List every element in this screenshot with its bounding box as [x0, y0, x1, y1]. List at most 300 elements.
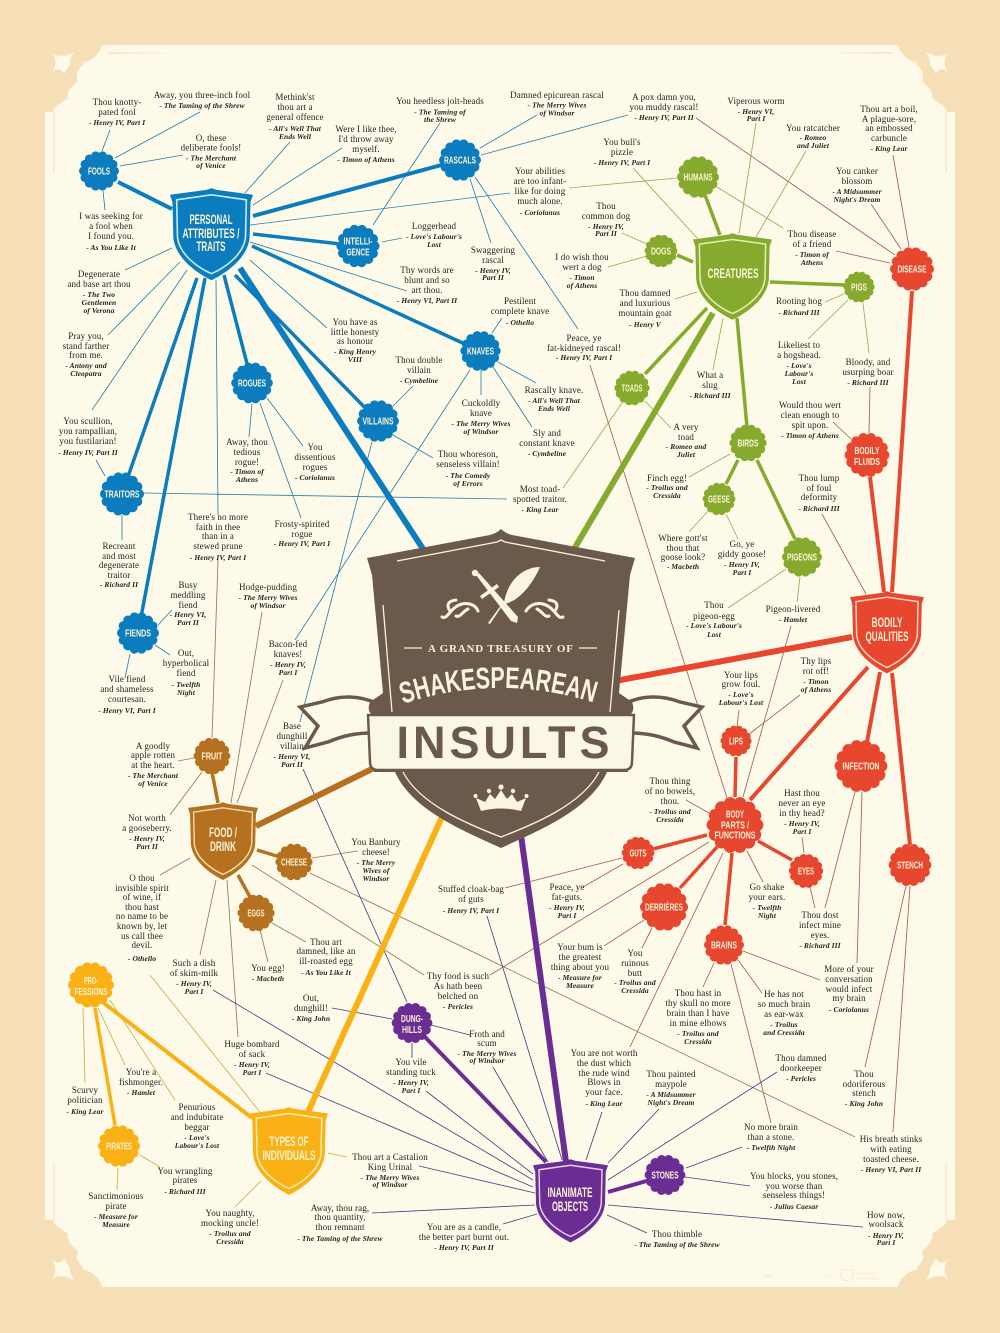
- quote: hyperbolical: Night: [176, 688, 196, 697]
- quote: rag: - The Taming of the Shrew: [297, 1234, 384, 1243]
- quote: lump: of foul: [806, 483, 832, 493]
- quote: infect eyes: eyes.: [811, 930, 829, 940]
- node: disease: DISEASE: [898, 264, 926, 276]
- quote: like thee: myself.: [352, 144, 380, 154]
- quote: bombard: of sack: [239, 1049, 266, 1059]
- quote: general offence: [266, 92, 324, 141]
- quote: scullion: you rampallian,: [59, 426, 117, 436]
- quote: no bowels: of no bowels,: [645, 786, 695, 796]
- quote: blunt: [397, 265, 458, 305]
- quote: wine: us call thee: [121, 931, 163, 941]
- quote: ear-wax: and Cressida: [763, 1028, 805, 1037]
- quote: ear-wax: as ear-wax: [764, 1009, 804, 1019]
- node: pigs: [847, 275, 871, 299]
- quote: lump: [798, 473, 841, 513]
- quote: abilities: [514, 166, 566, 217]
- quote: bum: [551, 942, 610, 990]
- node: pigeons: PIGEONS: [787, 552, 817, 564]
- quote: cuckoldly: knave: [470, 408, 492, 418]
- quote: castalion: of Windsor: [373, 1180, 407, 1189]
- quote: lips foul: grow foul.: [722, 679, 760, 689]
- quote: disease of a friend: - Timon of: [795, 250, 830, 259]
- quote: castalion: [352, 1152, 428, 1189]
- node: eggs: EGGS: [248, 908, 264, 920]
- node: fools: [84, 156, 114, 186]
- central crest: [296, 529, 706, 848]
- quote: beggar: and indubitate: [171, 1112, 223, 1122]
- quote: wine: invisible spirit: [115, 883, 169, 893]
- quote: general offence: Methink'st: [275, 92, 315, 102]
- quote: gooseberry: a gooseberry.: [122, 823, 172, 833]
- shield: personal attributes: ATTRIBUTES /: [182, 226, 240, 241]
- quote: muddy rascal: [629, 92, 699, 122]
- corner ornament: bottom left: [45, 1220, 102, 1287]
- quote: dissentious: rogues: [303, 462, 328, 472]
- corner ornament: top left: [45, 45, 102, 112]
- quote: breath: toasted cheese.: [863, 1154, 919, 1164]
- quote: candle: [419, 1222, 509, 1252]
- quote: toad: A very: [674, 422, 699, 432]
- icon: sword: [472, 570, 518, 623]
- quote: ill-roasted egg: Thou art: [310, 937, 342, 947]
- node: humans: HUMANS: [684, 172, 712, 184]
- quote: stewed prune: - Henry IV, Part I: [190, 553, 247, 562]
- quote: degenerate: and base art thou: [67, 279, 131, 289]
- shield: food and drink: DRINK: [210, 839, 236, 854]
- quote: woolsack: [867, 1210, 905, 1247]
- quote: bum: Measure: [565, 981, 594, 990]
- node: fiends: [122, 617, 154, 649]
- node: cheese: [280, 848, 308, 876]
- quote: boar: - Richard III: [847, 378, 890, 387]
- quote: base dunghill: [274, 721, 310, 769]
- quote: no bowels: thou.: [661, 796, 679, 806]
- quote: canker: You canker: [836, 166, 878, 176]
- quote: loggerhead: Loggerhead: [412, 221, 456, 231]
- quote: little honesty: - King Henry: [334, 347, 377, 356]
- quote: maypole: Thou painted: [646, 1069, 696, 1079]
- quote: thimble: - The Taming of the Shrew: [634, 1240, 721, 1249]
- node: professions: [73, 967, 109, 1003]
- quote: castalion: King Urinal: [368, 1162, 413, 1172]
- shield: creatures: [693, 233, 772, 320]
- quote: boar: usurping boar: [842, 367, 894, 377]
- quote: degenerate: - The Two: [83, 290, 115, 299]
- quote: scullion: - Henry IV, Part II: [58, 448, 119, 457]
- quote: pestilent: Pestilent: [504, 296, 536, 306]
- quote: giddy goose: - Henry IV,: [724, 560, 760, 569]
- icon: flourish right: [526, 600, 563, 617]
- quote: giddy goose: Part I: [733, 568, 752, 577]
- quote: finch egg: Cressida: [653, 491, 681, 500]
- quote: epicurean: [510, 90, 604, 118]
- quote: blocks: - Julius Caesar: [770, 1202, 818, 1211]
- quote: skull: - Troilus and: [677, 1029, 719, 1038]
- quote: ratcatcher: - Romeo: [800, 133, 827, 142]
- node: pigeons: [786, 542, 818, 572]
- thin connectors: purple: [213, 769, 863, 1233]
- node: infection: [841, 746, 881, 786]
- quote: spit upon: [779, 400, 841, 440]
- quote: pigeon-livered: Pigeon-livered: [766, 604, 821, 614]
- quote: gooseberry: [122, 813, 172, 851]
- thin connectors: blue: [92, 112, 628, 722]
- quote: pray you: [63, 331, 109, 378]
- quote: rag: Away, thou rag,: [311, 1203, 369, 1213]
- quote: hodge-pudding: of Windsor: [251, 601, 285, 610]
- thick branches: red: [615, 291, 912, 925]
- quote: common dog: - Henry IV,: [588, 222, 624, 231]
- quote: bacon-fed: Bacon-fed: [269, 639, 308, 649]
- quote: odoriferous: - King John: [845, 1099, 883, 1108]
- quote: cloak-bag: of guts: [458, 894, 484, 904]
- quote: ruinous butt: [614, 948, 656, 995]
- quote: blunt: - Henry VI, Part II: [397, 296, 458, 305]
- quote: belched: belched on: [438, 991, 479, 1001]
- thin connectors: green: [563, 123, 869, 608]
- quote: shake ears: your ears.: [749, 892, 785, 902]
- quote: pray you: from me.: [69, 350, 103, 360]
- quote: dust: your face.: [585, 1087, 623, 1097]
- shield body: [367, 529, 635, 848]
- quote: finch egg: - Troilus and: [646, 483, 688, 492]
- quote: belched: As hath been: [434, 981, 483, 991]
- quote: blocks: You blocks, you stones,: [750, 1171, 838, 1181]
- quote: candle: - Henry IV, Part II: [434, 1243, 495, 1252]
- quote: eye: Hast thou: [784, 788, 820, 798]
- footer maker mark: XX: [824, 1273, 830, 1278]
- quote: like thee: Were I like thee,: [335, 124, 397, 134]
- quote: blunt: blunt and so: [404, 275, 450, 285]
- node: dunghills: DUNG-: [401, 1013, 423, 1025]
- quote: dissentious: dissentious: [294, 452, 336, 462]
- quote: canker: [832, 166, 882, 204]
- title: Shakespearean: [403, 688, 598, 704]
- shield: bodily qualities: [850, 591, 924, 673]
- node: geese: [706, 486, 732, 512]
- quote: spit upon: clean enough to: [781, 410, 840, 420]
- quote: cuckoldly: of Windsor: [464, 427, 498, 436]
- quote: jolt-heads: You heedless jolt-heads: [396, 96, 484, 106]
- quote: ratcatcher: You ratcatcher: [786, 123, 840, 133]
- icon: flourish left: [442, 600, 478, 617]
- quote: wine: of wine, if: [123, 892, 161, 902]
- quote: muddy rascal: A pox damn you,: [632, 92, 696, 102]
- quote: loggerhead: Lost: [426, 240, 442, 249]
- node: stones: STONES: [652, 1170, 678, 1182]
- quote: hodge-pudding: [239, 582, 297, 610]
- quote: fishmonger: [119, 1067, 163, 1097]
- quote: goose look: goose look?: [661, 552, 705, 562]
- quote: viperous: - Henry VI,: [738, 107, 774, 116]
- quote: froth: Froth and: [469, 1029, 505, 1039]
- node: geese: GEESE: [708, 494, 730, 506]
- quote: double villain: - Cymbeline: [400, 376, 439, 385]
- quote: common dog: common dog: [582, 211, 631, 221]
- quote: standing tuck: standing tuck: [386, 1067, 436, 1077]
- quote: sanctimonious: - Measure for: [94, 1212, 138, 1221]
- quote: bum: - Measure for: [558, 973, 602, 982]
- quote: standing tuck: You vile: [395, 1057, 427, 1067]
- node: knaves: [465, 335, 496, 367]
- node: pigs: PIGS: [851, 282, 867, 294]
- quote: skim-milk: [170, 958, 218, 996]
- quote: no bowels: [645, 776, 695, 824]
- quote: toad: - Romeo and: [666, 442, 706, 451]
- quote: wrangling pirates: [158, 1166, 213, 1196]
- quote: infect eyes: [799, 910, 842, 950]
- quote: stewed prune: faith in thee: [196, 522, 240, 532]
- quote: knotty-pated: Thou knotty-: [93, 97, 141, 107]
- quote: common dog: Part II: [595, 229, 618, 238]
- quote: lump: Thou lump: [799, 473, 840, 483]
- quote: common dog: Thou: [596, 201, 616, 211]
- quote: constant knave: constant knave: [519, 438, 575, 448]
- shield: personal attributes: [170, 188, 253, 280]
- quote: frosty-spirited: Frosty-spirited: [275, 519, 330, 529]
- quote: lips foul: Your lips: [724, 670, 758, 680]
- quote: wrangling pirates: - Richard III: [164, 1187, 207, 1196]
- quote: swaggering: Part II: [482, 273, 505, 282]
- quote: politician: Scurvy: [72, 1085, 98, 1095]
- quote: eye: never an eye: [779, 798, 825, 808]
- quote: cloak-bag: - Henry IV, Part I: [443, 906, 500, 915]
- quote: goat: and luxurious: [620, 298, 671, 308]
- quote: cuckoldly: - The Merry Wives: [452, 419, 510, 428]
- quote: spit upon: Would thou wert: [779, 400, 841, 410]
- quote: whoreson: Thou whoreson,: [438, 449, 498, 459]
- quote: no bowels: Thou thing: [650, 776, 691, 786]
- quote: pray you: stand farther: [63, 341, 109, 351]
- quote: pigeon-livered: [766, 604, 821, 624]
- quote: odoriferous: stench: [852, 1088, 876, 1098]
- quote: fat-guts: Part I: [558, 911, 577, 920]
- quote: canker: - A Midsummer: [832, 187, 882, 196]
- quote: giddy goose: [718, 539, 766, 577]
- quote: abilities: - Coriolanus: [520, 208, 560, 217]
- quote: banbury: - The Merry: [357, 858, 396, 867]
- quote: goat: - Henry V: [629, 320, 662, 329]
- node: villains: [362, 405, 394, 437]
- quote: skull: Cressida: [684, 1037, 712, 1046]
- quote: banbury: Wives of: [363, 866, 391, 875]
- quote: jolt-heads: - The Taming of: [414, 108, 467, 116]
- quote: whoreson: of Errors: [453, 479, 483, 488]
- node: eggs: [242, 899, 270, 927]
- quote: doorkeeper: [775, 1053, 827, 1083]
- quote: mocking uncle: You naughty,: [206, 1208, 254, 1218]
- quote: ear-wax: [758, 989, 811, 1037]
- quote: out dunghill: [292, 993, 330, 1023]
- footer maker mark: CHARLEY: [856, 1271, 877, 1276]
- quote: frosty-spirited: - Henry IV, Part I: [274, 539, 331, 548]
- node: body parts: BODY: [726, 808, 744, 820]
- thin connectors: red: [490, 118, 910, 1132]
- quote: jolt-heads: [396, 96, 484, 124]
- quote: frosty-spirited: [274, 519, 331, 548]
- node: intelligence: INTELLI-: [344, 236, 373, 248]
- quote: ill-roasted egg: - As You Like It: [301, 968, 352, 977]
- quote: degenerate: Degenerate: [78, 269, 120, 279]
- quote: castalion: - The Merry Wives: [361, 1173, 419, 1182]
- quote: pizzle: pizzle: [611, 147, 633, 157]
- quote: frosty-spirited: rogue: [291, 529, 313, 539]
- quote: seeking a fool: - As You Like It: [86, 243, 137, 252]
- node: dogs: [648, 238, 674, 264]
- quote: blocks: senseless things!: [763, 1190, 825, 1200]
- quote: shake ears: - Twelfth: [753, 903, 781, 912]
- quote: ill-roasted egg: ill-roasted egg: [299, 956, 353, 966]
- quote: goose look: Where gott'st: [658, 533, 708, 543]
- quote: recreant: Recreant: [103, 541, 136, 551]
- quote: tedious rogue: tedious: [234, 447, 261, 457]
- quote: hyperbolical: hyperbolical: [163, 658, 210, 668]
- quote: slug: slug: [702, 380, 718, 390]
- quote: beggar: Labour's Lost: [174, 1141, 220, 1150]
- footer maker mark: 1564: [763, 1273, 774, 1278]
- quote: general offence: - All's Well That: [269, 124, 322, 133]
- quote: lips rot: [801, 656, 832, 694]
- quote: stewed prune: There's no more: [188, 512, 248, 522]
- quote: sanctimonious: pirate: [105, 1201, 127, 1211]
- node: rogues: ROGUES: [238, 378, 266, 390]
- quote: degenerate: [67, 269, 131, 315]
- footer maker mark: CHASTWELL: [856, 1276, 884, 1281]
- quote: goat: Thou damned: [619, 288, 671, 298]
- quote: standing tuck: - Henry IV,: [393, 1078, 429, 1087]
- quote: wine: [115, 873, 169, 963]
- quote: maypole: [646, 1069, 696, 1107]
- quote: viperous: Part I: [747, 114, 766, 123]
- quote: general offence: Ends Well: [278, 132, 312, 141]
- quote: maypole: maypole: [655, 1079, 687, 1089]
- quote: blocks: you worse than: [766, 1181, 823, 1191]
- quote: toad: toad: [678, 432, 694, 442]
- quote: beggar: Penurious: [178, 1102, 216, 1112]
- quote: hogshead: Likeliest to: [778, 340, 820, 350]
- node: birds: BIRDS: [738, 438, 758, 450]
- quote: rascally: Ends Well: [537, 404, 571, 413]
- quote: tedious rogue: rogue!: [235, 457, 259, 467]
- quote: dust: You are not worth: [571, 1048, 638, 1058]
- quote: sanctimonious: [88, 1191, 144, 1229]
- quote: finch egg: [646, 473, 688, 500]
- thick branches: blue: [118, 160, 480, 633]
- quote: epicurean: Damned epicurean rascal: [510, 90, 604, 100]
- quote: stone: [744, 1122, 798, 1152]
- ribbon tail: left: [300, 697, 378, 748]
- quote: dissentious: [294, 442, 336, 482]
- corner ornament: bottom right: [898, 1220, 955, 1287]
- node: bodily fluids: BODILY: [854, 445, 880, 457]
- quote: eye: [779, 788, 825, 836]
- quote: odoriferous: odoriferous: [843, 1079, 886, 1089]
- quote: pigeon-egg: Lost: [706, 630, 722, 639]
- quote: pestilent: - Othello: [506, 318, 534, 327]
- quote: pigeon-egg: pigeon-egg: [693, 611, 735, 621]
- quote: froth: of Windsor: [470, 1056, 504, 1065]
- quote: ratcatcher: and Juliet: [797, 141, 830, 150]
- quote: fishmonger: - Hamlet: [127, 1088, 156, 1097]
- quote: goat: mountain goat: [618, 308, 672, 318]
- quote: candle: You are as a candle,: [427, 1222, 501, 1232]
- node: intelligence: [341, 229, 375, 263]
- quote: muddy rascal: you muddy rascal!: [629, 102, 699, 112]
- quote: infect eyes: Thou dost: [801, 910, 839, 920]
- quote: tedious rogue: Away, thou: [226, 437, 268, 447]
- node: dunghills: HILLS: [402, 1024, 422, 1036]
- quote: whoreson: senseless villain!: [436, 459, 500, 469]
- quote: lips rot: - Timon: [803, 677, 829, 686]
- quote: general offence: thou art a: [277, 102, 313, 112]
- quote: base dunghill: dunghill: [277, 731, 308, 741]
- quote: spit upon: - Timon of Athens: [781, 431, 839, 440]
- quote: apple: of Venice: [138, 779, 168, 788]
- node: pirates: [103, 1130, 135, 1162]
- quote: pizzle: - Henry IV, Part I: [594, 158, 651, 167]
- quote: infect brain: would infect: [826, 984, 873, 994]
- shield: food and drink: [188, 802, 258, 880]
- node: bodily fluids: FLUIDS: [854, 456, 880, 468]
- quote: canker: Night's Dream: [833, 195, 881, 204]
- quote: muddy rascal: - Henry IV, Part II: [634, 113, 695, 122]
- quote: scullion: You scullion,: [63, 416, 113, 426]
- quote: boil: an embossed: [865, 123, 913, 133]
- quote: bacon-fed: Part I: [279, 668, 298, 677]
- quote: ratcatcher: [786, 123, 840, 150]
- quote: constant knave: [519, 428, 575, 458]
- quote: belched: Thy food is such: [427, 971, 489, 981]
- quote: cloak-bag: [438, 884, 504, 915]
- quote: viperous: [727, 96, 785, 123]
- quote: skim-milk: Such a dish: [173, 958, 216, 968]
- quote: busy fiend: fiend: [178, 600, 198, 610]
- quote: breath: His breath stinks: [860, 1134, 923, 1144]
- quote: belched: [427, 971, 489, 1011]
- node: pirates: PIRATES: [106, 1140, 132, 1152]
- quote: bombard: Huge bombard: [224, 1039, 280, 1049]
- quote: woolsack: How now,: [867, 1210, 905, 1220]
- quote: lips rot: Thy lips: [801, 656, 832, 666]
- node: guts: GUTS: [630, 848, 646, 860]
- quote: woolsack: Part I: [877, 1238, 896, 1247]
- quote: pigeon-livered: - Hamlet: [779, 615, 808, 624]
- quote: pray you: Cleopatra: [70, 369, 102, 378]
- quote: rascally: Rascally knave.: [525, 385, 583, 395]
- quote: stewed prune: than in a: [202, 531, 234, 541]
- quote: giddy goose: Go, ye: [730, 539, 754, 549]
- quote: jolt-heads: the Shrew: [424, 115, 457, 124]
- quote: pigeon-egg: [686, 600, 742, 639]
- quote block: all insults: [58, 90, 923, 1252]
- node: professions: FESSIONS: [74, 986, 108, 998]
- quote: doorkeeper: Thou damned: [775, 1053, 827, 1063]
- quote: fat-kidneyed: fat-kidneyed rascal!: [547, 343, 621, 353]
- quote: seeking a fool: I was seeking for: [79, 211, 143, 221]
- quote: deliberate fools: - The Merchant: [186, 154, 237, 162]
- quote: wine: - Othello: [128, 954, 156, 963]
- quote: swaggering: [471, 245, 515, 282]
- quote: no bowels: Cressida: [656, 815, 684, 824]
- quote: mocking uncle: - Troilus and: [209, 1229, 251, 1238]
- quote: skim-milk: - Henry IV,: [176, 979, 212, 988]
- quote: skull: thy skull no more: [665, 998, 731, 1008]
- quote: wine: devil.: [132, 940, 152, 950]
- quote: abilities: Your abilities: [515, 166, 565, 176]
- quote: beggar: [171, 1102, 223, 1150]
- quote: apple: at the heart.: [131, 760, 175, 770]
- quote: infect brain: [824, 964, 874, 1014]
